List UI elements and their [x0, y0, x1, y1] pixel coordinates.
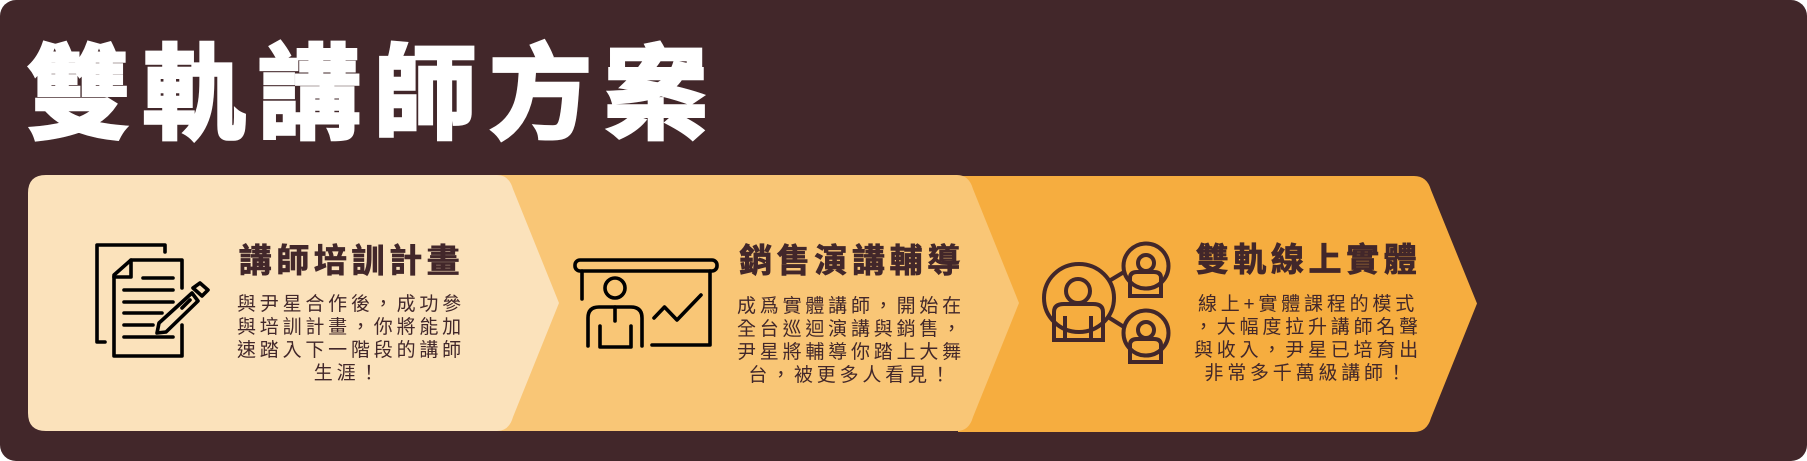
text block: step 3 description: 與收入，尹星已培育出: [1194, 339, 1422, 361]
text block: step 1 description: 速踏入下一階段的講師: [237, 339, 465, 361]
text block: step 3 description: [1194, 293, 1422, 384]
text block: step 2 description: 成爲實體講師，開始在: [737, 295, 965, 317]
text block: step 2 description: 台，被更多人看見！: [748, 364, 954, 386]
text block: step 2 description: 尹星將輔導你踏上大舞: [737, 341, 965, 363]
text block: step 3 description: ，大幅度拉升講師名聲: [1194, 316, 1422, 338]
text block: step 3 description: 線上+實體課程的模式: [1198, 293, 1418, 315]
text block: step 3 description: 非常多千萬級講師！: [1204, 362, 1410, 384]
heading: step 3: 雙軌線上實體: [1196, 241, 1421, 278]
text block: step 1 description: 生涯！: [314, 362, 382, 384]
panel: step 2 sales speech coaching: [480, 175, 1019, 431]
text block: step 1 description: 與尹星合作後，成功參: [237, 293, 465, 315]
text block: step 2 description: 全台巡迴演講與銷售，: [737, 318, 965, 340]
heading: step 1: 講師培訓計畫: [239, 242, 464, 279]
heading: step 2: 銷售演講輔導: [739, 242, 965, 279]
text block: step 1 description: 與培訓計畫，你將能加: [237, 316, 465, 338]
icon: connected people: [1044, 244, 1168, 362]
icon: presentation board: [575, 260, 717, 347]
panel: step 3 online and in-person: [958, 176, 1477, 432]
text block: step 1 description: [237, 293, 465, 384]
icon: document and pencil: [97, 245, 208, 356]
text block: step 2 description: [737, 295, 965, 386]
panel: step 1 instructor training plan: [28, 175, 559, 431]
title: 雙軌講師方案: [27, 37, 720, 152]
